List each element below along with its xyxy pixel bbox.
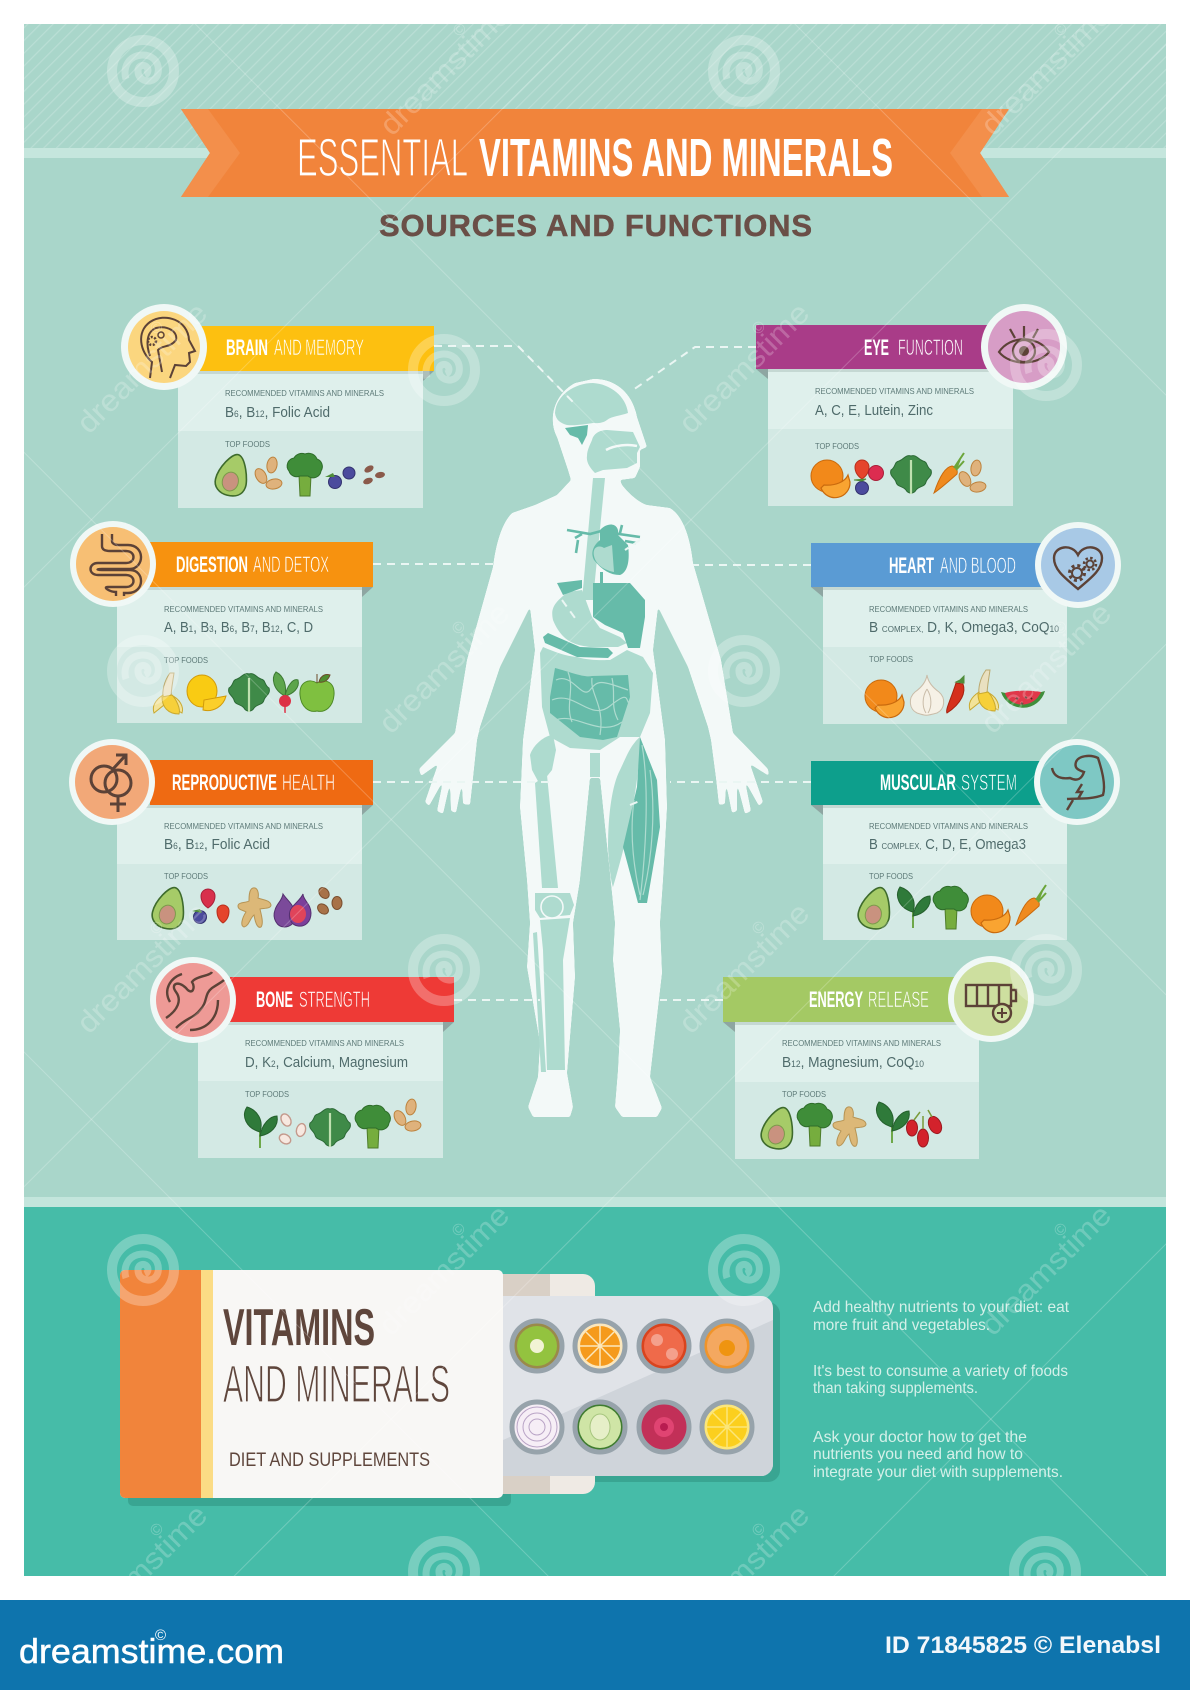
muscular header bbox=[811, 761, 1041, 805]
blister pack bbox=[480, 1296, 773, 1476]
footer bar bbox=[0, 1600, 1190, 1690]
muscular title: SYSTEM bbox=[961, 770, 1017, 795]
reproductive recommended label: RECOMMENDED VITAMINS AND MINERALS bbox=[164, 821, 323, 831]
eye foods bbox=[811, 453, 987, 498]
panel: reproductive health bbox=[69, 739, 373, 940]
eye header bbox=[756, 325, 988, 369]
energy title: ENERGY bbox=[809, 987, 863, 1012]
muscular card body bbox=[811, 805, 1067, 940]
footer logo: © bbox=[155, 1627, 166, 1644]
brain title: BRAIN bbox=[226, 335, 268, 360]
panel: digestion and detox bbox=[70, 521, 373, 723]
heart title: HEART bbox=[889, 553, 934, 578]
muscular vitamins: B COMPLEX, C, D, E, Omega3 bbox=[869, 837, 1026, 853]
icon: gender symbols bbox=[69, 739, 155, 825]
heart inner and vessels bbox=[567, 525, 640, 572]
note 1 bbox=[813, 1299, 1070, 1334]
note 3 bbox=[813, 1429, 1063, 1481]
note 2 bbox=[813, 1363, 1068, 1397]
organs: light parts bbox=[530, 383, 653, 1072]
pills: fruit and vegetable slices bbox=[512, 1321, 752, 1452]
title banner bbox=[181, 109, 1009, 197]
reproductive top foods label: TOP FOODS bbox=[164, 871, 208, 881]
muscular foods bbox=[855, 884, 1046, 933]
digestion foods bbox=[153, 672, 334, 714]
footer logo: dreamstime.com bbox=[19, 1633, 284, 1671]
brain card body bbox=[178, 371, 434, 508]
eye card body bbox=[756, 369, 1013, 506]
title ribbon side bands bbox=[24, 148, 1166, 158]
icon: joint bones bbox=[150, 957, 236, 1043]
muscular recommended label: RECOMMENDED VITAMINS AND MINERALS bbox=[869, 821, 1028, 831]
heart recommended label: RECOMMENDED VITAMINS AND MINERALS bbox=[869, 604, 1028, 614]
digestion title: DIGESTION bbox=[176, 552, 248, 577]
divider band bbox=[24, 1197, 1166, 1207]
reproductive title: HEALTH bbox=[282, 770, 335, 795]
vitamin box with blister pack bbox=[120, 1270, 780, 1506]
icon: eye bbox=[981, 304, 1067, 390]
advice notes bbox=[813, 1299, 1070, 1481]
icon: heart with gears bbox=[1035, 522, 1121, 608]
intestine and muscle lines bbox=[552, 672, 653, 900]
brain foods bbox=[212, 451, 385, 499]
brain header bbox=[199, 326, 434, 371]
bone foods bbox=[245, 1098, 422, 1148]
bone card body bbox=[198, 1022, 454, 1158]
panel: muscular system bbox=[811, 739, 1120, 940]
energy vitamins: B12, Magnesium, CoQ10 bbox=[782, 1055, 924, 1071]
organs: dark parts bbox=[543, 425, 660, 903]
heart vitamins: B COMPLEX, D, K, Omega3, CoQ10 bbox=[869, 620, 1059, 636]
footer image id: ID 71845825 © Elenabsl bbox=[885, 1632, 1161, 1659]
dashed connector lines bbox=[373, 346, 811, 1000]
box subtitle: DIET AND SUPPLEMENTS bbox=[229, 1449, 430, 1471]
bone title: BONE bbox=[256, 987, 293, 1012]
human body figure bbox=[419, 379, 769, 1117]
note 3: Ask your doctor how to get the bbox=[813, 1429, 1027, 1446]
note 2: It's best to consume a variety of foods bbox=[813, 1363, 1068, 1380]
panel: heart and blood bbox=[811, 522, 1121, 724]
muscular title: MUSCULAR bbox=[880, 770, 956, 795]
reproductive header bbox=[150, 760, 373, 805]
eye vitamins: A, C, E, Lutein, Zinc bbox=[815, 403, 933, 419]
energy foods bbox=[758, 1102, 944, 1152]
icon: brain head bbox=[121, 304, 207, 390]
box shadows bbox=[128, 1278, 780, 1506]
heart title: AND BLOOD bbox=[940, 553, 1016, 578]
energy title: RELEASE bbox=[868, 987, 929, 1012]
heart title bbox=[889, 553, 1016, 578]
note 3: nutrients you need and how to bbox=[813, 1446, 1023, 1463]
panel: energy release bbox=[723, 956, 1034, 1159]
eye top foods label: TOP FOODS bbox=[815, 441, 859, 451]
digestion title: AND DETOX bbox=[253, 552, 329, 577]
digestion vitamins: A, B1, B3, B6, B7, B12, C, D bbox=[164, 620, 313, 636]
eye title bbox=[864, 335, 963, 360]
mouth line bbox=[606, 445, 637, 450]
title text light: ESSENTIAL bbox=[297, 128, 468, 188]
icon: flexed arm bbox=[1034, 739, 1120, 825]
reproductive vitamins: B6, B12, Folic Acid bbox=[164, 837, 270, 853]
subtitle: SOURCES AND FUNCTIONS bbox=[379, 208, 812, 243]
heart top foods label: TOP FOODS bbox=[869, 654, 913, 664]
brain vitamins: B6, B12, Folic Acid bbox=[225, 405, 330, 421]
panel: bone strength bbox=[150, 957, 454, 1158]
brain title bbox=[226, 335, 364, 360]
energy recommended label: RECOMMENDED VITAMINS AND MINERALS bbox=[782, 1038, 941, 1048]
box title bold: VITAMINS bbox=[223, 1299, 375, 1357]
panel: mint upper background bbox=[24, 24, 1166, 1197]
title text bold: VITAMINS AND MINERALS bbox=[479, 128, 893, 188]
panel: teal lower background bbox=[24, 1207, 1166, 1576]
eye title: EYE bbox=[864, 335, 889, 360]
reproductive card body bbox=[117, 805, 373, 940]
brain top foods label: TOP FOODS bbox=[225, 439, 270, 449]
energy card body bbox=[723, 1022, 979, 1159]
note 3: integrate your diet with supplements. bbox=[813, 1464, 1063, 1481]
panel: eye function bbox=[756, 304, 1067, 506]
eye title: FUNCTION bbox=[898, 335, 963, 360]
muscular top foods label: TOP FOODS bbox=[869, 871, 913, 881]
bone top foods label: TOP FOODS bbox=[245, 1089, 289, 1099]
note 2: than taking supplements. bbox=[813, 1380, 978, 1397]
box front bbox=[120, 1270, 503, 1498]
icon: intestine bbox=[70, 521, 156, 607]
heart card body bbox=[811, 587, 1067, 724]
note 1: more fruit and vegetables. bbox=[813, 1317, 990, 1334]
panel: brain and memory bbox=[121, 304, 434, 508]
icon: battery bbox=[948, 956, 1034, 1042]
digestion recommended label: RECOMMENDED VITAMINS AND MINERALS bbox=[164, 604, 323, 614]
heart foods bbox=[865, 670, 1045, 718]
digestion top foods label: TOP FOODS bbox=[164, 655, 208, 665]
bone title bbox=[256, 987, 370, 1012]
reproductive title: REPRODUCTIVE bbox=[172, 770, 277, 795]
brain title: AND MEMORY bbox=[274, 335, 364, 360]
bone recommended label: RECOMMENDED VITAMINS AND MINERALS bbox=[245, 1038, 404, 1048]
eye recommended label: RECOMMENDED VITAMINS AND MINERALS bbox=[815, 386, 974, 396]
bone header bbox=[230, 977, 454, 1022]
bone vitamins: D, K2, Calcium, Magnesium bbox=[245, 1055, 408, 1071]
bone title: STRENGTH bbox=[299, 987, 370, 1012]
blister backing tab bbox=[470, 1274, 595, 1494]
heart header bbox=[811, 543, 1041, 587]
reproductive foods bbox=[149, 884, 342, 932]
brain recommended label: RECOMMENDED VITAMINS AND MINERALS bbox=[225, 388, 384, 398]
box title light: AND MINERALS bbox=[223, 1355, 450, 1414]
body silhouette bbox=[419, 379, 769, 1117]
digestion card body bbox=[117, 587, 373, 723]
energy top foods label: TOP FOODS bbox=[782, 1089, 826, 1099]
energy header bbox=[723, 977, 959, 1022]
note 1: Add healthy nutrients to your diet: eat bbox=[813, 1299, 1070, 1316]
digestion header bbox=[150, 542, 373, 587]
knee cap ring bbox=[541, 896, 563, 918]
